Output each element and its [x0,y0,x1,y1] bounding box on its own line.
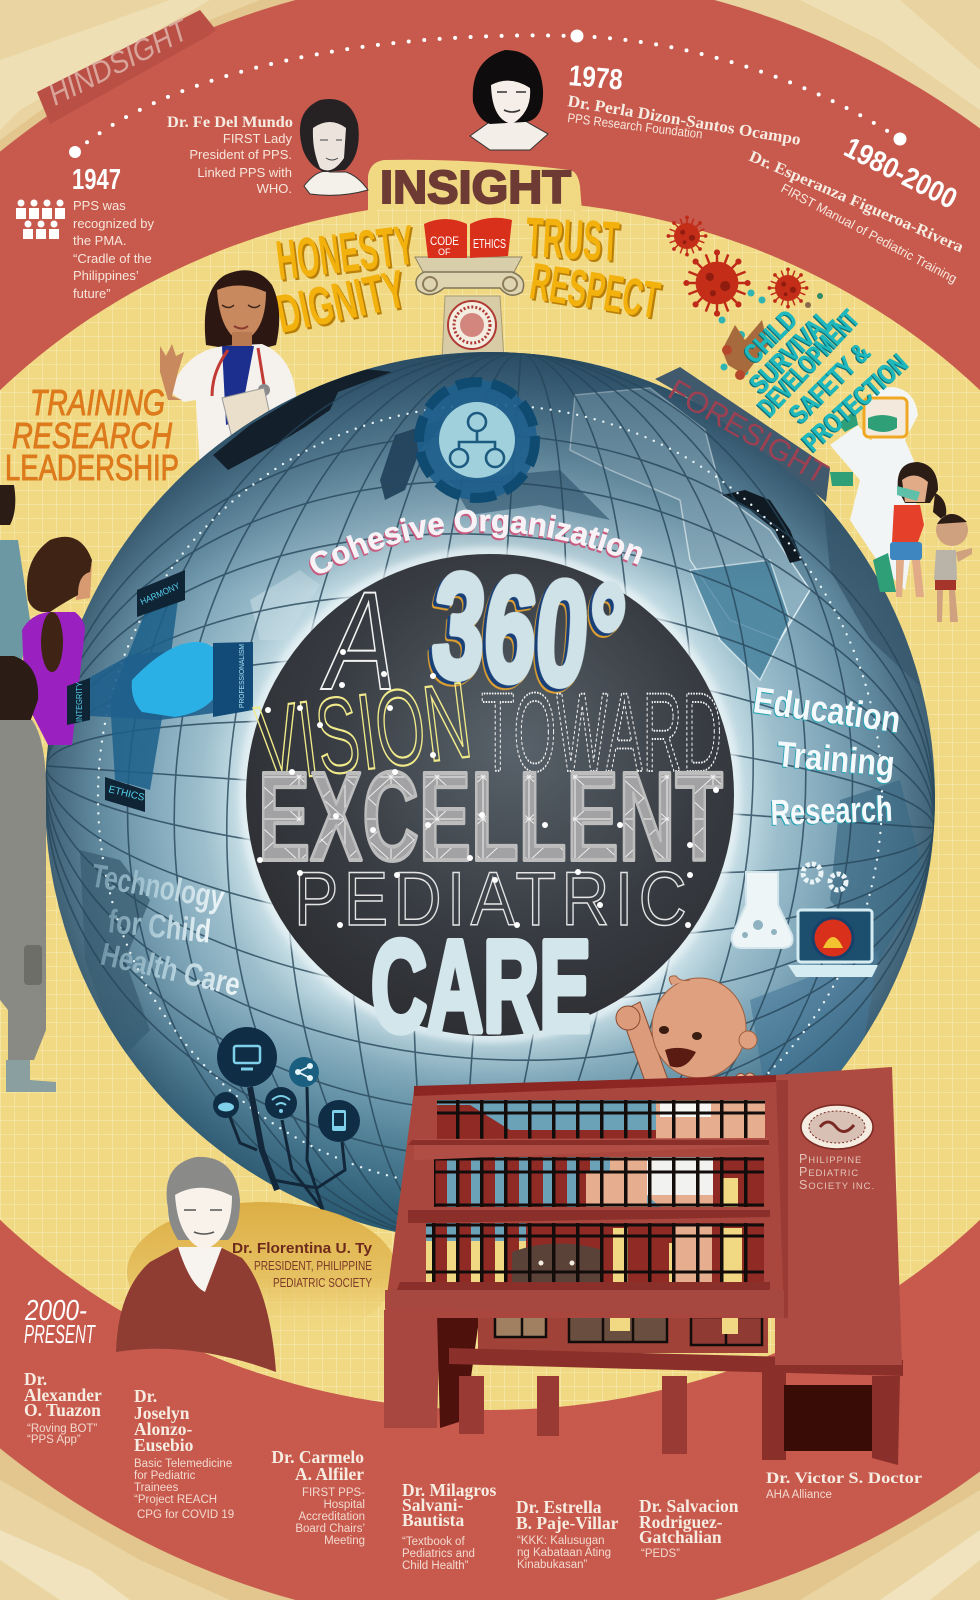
Dr. Alexander O. Tuazon: O. Tuazon [24,1400,101,1420]
crib legs and bench [384,1310,903,1465]
insight heading tab [368,160,582,212]
icon: gears [803,864,846,890]
globe text: education training research [751,679,903,833]
Dr. Florentina U. Ty caption: Dr. Florentina U. Ty [232,1241,372,1257]
heading: training research leadership: TRAINING [30,382,165,423]
globe text: technology for child health care: Health Care [97,936,244,1003]
yellow grid inner field [0,200,980,1410]
Dr. Salvacion Rodriguez-Gatchalian: “PEDS” [641,1548,680,1560]
group of people at left [0,485,92,1092]
timeline 1978 block: Dr. Perla Dizon-Santos Ocampo [566,91,802,149]
technology icons cluster [213,1027,360,1210]
Dr. Fe Del Mundo text: WHO. [257,181,292,196]
Dr. Florentina U. Ty caption: PRESIDENT, PHILIPPINE [254,1259,372,1273]
Dr. Joselyn Alonzo-Eusebio: Basic Telemedicine [134,1458,232,1470]
icon: coronavirus large [683,249,751,317]
Dr. Carmelo A. Alfiler: Board Chairs’ [295,1523,365,1535]
child survival text block: SAFETY & [784,337,876,429]
main title: 360° [428,542,631,720]
Dr. Salvacion Rodriguez-Gatchalian: Rodriguez- [639,1512,723,1532]
center dark circle [239,547,741,1043]
Dr. Fe Del Mundo text [167,114,293,196]
cross with hand icon: HARMONY [139,581,181,607]
Dr. Florentina U. Ty portrait [116,1157,397,1372]
main title: VISION [250,659,477,805]
arc title: cohesive organization: Cohesive Organization [309,510,642,576]
crib front frame [384,1075,784,1318]
crib side panel with seal and name: PHILIPPINE [799,1152,862,1166]
values: honesty dignity trust respect: TRUST [524,205,621,273]
Dr. Milagros Salvani-Bautista: Pediatrics and [402,1548,475,1560]
Dr. Estrella B. Paje-Villar: ng Kabataan Ating [517,1547,611,1559]
globe text: education training research: Training [775,733,896,784]
Dr. Carmelo A. Alfiler: FIRST PPS- [302,1487,365,1499]
timeline dotted arc [69,30,906,158]
crib building [384,1067,903,1465]
Dr. Estrella B. Paje-Villar: “KKK: Kalusugan [517,1535,605,1547]
main title [250,542,723,1059]
values: honesty dignity trust respect: DIGNITY [271,259,411,345]
crib side panel with seal and name [768,1067,902,1365]
timeline 1980-2000 block: Dr. Esperanza Figueroa-Rivera [746,148,966,256]
globe text: education training research: Education [751,679,903,741]
Dr. Salvacion Rodriguez-Gatchalian [639,1496,739,1560]
child survival text block: DEVELOPMENT [752,304,865,422]
values: honesty dignity trust respect: RESPECT [526,253,664,330]
timeline 1947 block: “Cradle of the [73,251,152,266]
heading: 2000-present: 2000- [24,1295,87,1327]
heading: training research leadership [5,382,179,488]
globe text: technology for child health care: for Child [106,902,213,950]
timeline 1947 block [72,164,154,301]
cross with hand icon [67,570,253,812]
main title: CARE [371,913,591,1059]
health worker in protective suit [830,387,918,592]
crib window row 1 [437,1100,765,1140]
icon: coronavirus fading [768,268,808,308]
icon: organization gear network [417,380,537,500]
values: honesty dignity trust respect: HONESTY [273,213,417,292]
heading: training research leadership: RESEARCH [12,415,173,456]
heading: 2000-present [24,1295,96,1349]
timeline 1947 block: future” [73,286,111,301]
globe text: education training research: Research [770,788,893,833]
main title: A [321,562,396,719]
Dr. Salvacion Rodriguez-Gatchalian: Dr. Salvacion [639,1496,739,1516]
child with mask [890,462,946,597]
child survival text block: SURVIVAL [744,304,839,399]
Dr. Estrella B. Paje-Villar: Kinabukasan” [517,1559,587,1571]
Dr. Joselyn Alonzo-Eusebio: Alonzo- [134,1419,192,1439]
crib window row 3 with teddy bear [426,1223,764,1283]
infographic canvas: TOWARD [481,670,722,795]
globe continents [15,322,965,1272]
heading: 2000-present: PRESENT [24,1319,96,1349]
Dr. Alexander O. Tuazon: Dr. [24,1369,47,1389]
Dr. Joselyn Alonzo-Eusebio: “Project REACH [134,1494,217,1506]
globe [46,352,935,1232]
doctor illustration [160,270,296,470]
Dr. Joselyn Alonzo-Eusebio [134,1386,234,1521]
Dr. Milagros Salvani-Bautista [402,1480,496,1572]
pillar with code of ethics book: OF [438,247,451,257]
Dr. Joselyn Alonzo-Eusebio: for Pediatric [134,1470,196,1482]
main title: PEDIATRIC [294,857,692,942]
ribbon: foresight: FORESIGHT [662,373,833,491]
Dr. Alexander O. Tuazon: “PPS App” [27,1434,81,1446]
crib window row 2 [434,1157,764,1207]
portrait: Dr. Perla Dizon-Santos Ocampo [470,50,548,150]
timeline 1978 block: 1978 [567,60,624,97]
icon: group of people [16,200,65,239]
timeline 1947 block: recognized by [73,216,154,231]
Dr. Victor S. Doctor: Dr. Victor S. Doctor [766,1470,922,1487]
icon: coronavirus small [667,216,707,256]
timeline 1978 block: PPS Research Foundation [567,110,703,142]
cross with hand icon: ETHICS [107,784,146,804]
Dr. Joselyn Alonzo-Eusebio: Joselyn [134,1403,190,1423]
crib side panel with seal and name: SOCIETY INC. [799,1178,875,1192]
timeline 1947 block: Philippines’ [73,268,139,283]
Dr. Fe Del Mundo text: FIRST Lady [223,131,292,146]
Dr. Joselyn Alonzo-Eusebio: Dr. [134,1386,157,1406]
Dr. Victor S. Doctor: AHA Alliance [766,1489,832,1501]
Dr. Joselyn Alonzo-Eusebio: Eusebio [134,1435,194,1455]
timeline 1980-2000 block: 1980-2000 [839,132,962,216]
Dr. Milagros Salvani-Bautista: “Textbook of [402,1536,465,1548]
Dr. Joselyn Alonzo-Eusebio: CPG for COVID 19 [137,1509,234,1521]
Dr. Milagros Salvani-Bautista: Dr. Milagros [402,1480,496,1500]
Dr. Milagros Salvani-Bautista: Bautista [402,1510,464,1530]
Dr. Carmelo A. Alfiler: Meeting [324,1535,365,1547]
Dr. Florentina U. Ty caption [232,1241,373,1290]
Dr. Alexander O. Tuazon: Alexander [24,1385,102,1405]
child survival text block: CHILD [738,304,803,369]
icon: flask [732,872,793,948]
Dr. Estrella B. Paje-Villar: B. Paje-Villar [516,1513,619,1533]
Dr. Florentina U. Ty caption: PEDIATRIC SOCIETY [273,1276,373,1290]
Dr. Fe Del Mundo text: Dr. Fe Del Mundo [167,114,293,131]
Dr. Joselyn Alonzo-Eusebio: Trainees [134,1482,179,1494]
heading: insight: INSIGHT [380,161,571,213]
Dr. Milagros Salvani-Bautista: Salvani- [402,1495,463,1515]
ribbon: hindsight: HINDSIGHT [43,13,196,112]
Dr. Carmelo A. Alfiler: Hospital [323,1499,365,1511]
child survival text block [738,304,914,457]
pillar with code of ethics book: CODE [430,234,459,248]
child survival text block: PROTECTION [797,348,914,457]
portrait: Dr. Fe Del Mundo [300,99,368,195]
globe text: technology for child health care: Technology [89,856,228,916]
Dr. Alexander O. Tuazon: “Roving BOT” [27,1423,97,1435]
icon: laptop with asean logo [788,910,878,977]
Dr. Victor S. Doctor [766,1470,922,1501]
small child [934,514,972,622]
crib side panel with seal and name: PEDIATRIC [799,1165,859,1179]
timeline 1947 block: the PMA. [73,233,126,248]
timeline 1978 block [566,60,802,149]
Dr. Carmelo A. Alfiler [271,1447,365,1547]
values: honesty dignity trust respect [271,205,664,345]
Dr. Fe Del Mundo text: Linked PPS with [197,165,292,180]
Dr. Milagros Salvani-Bautista: Child Health” [402,1560,469,1572]
Dr. Estrella B. Paje-Villar [516,1497,619,1571]
Dr. Carmelo A. Alfiler: A. Alfiler [295,1464,364,1484]
timeline 1947 block: 1947 [72,164,121,196]
Dr. Alexander O. Tuazon [24,1369,102,1446]
timeline 1980-2000 block [746,132,966,286]
cross with hand icon: PROFESSIONALISM [237,644,246,708]
cross with hand icon: INTEGRITY [75,681,84,722]
Dr. Carmelo A. Alfiler: Dr. Carmelo [271,1447,364,1467]
virus dissolve particles [718,290,823,380]
timeline 1947 block: PPS was [73,198,126,213]
Dr. Fe Del Mundo text: President of PPS. [189,147,292,162]
Dr. Salvacion Rodriguez-Gatchalian: Gatchalian [639,1527,722,1547]
baby head and arm [616,976,760,1095]
heading: training research leadership: LEADERSHIP [5,447,179,488]
pillar with code of ethics book: ETHICS [473,236,506,251]
pillar with code of ethics book [415,218,524,360]
globe text: technology for child health care [89,856,244,1003]
Dr. Estrella B. Paje-Villar: Dr. Estrella [516,1497,602,1517]
Dr. Carmelo A. Alfiler: Accreditation [299,1511,365,1523]
timeline 1980-2000 block: FIRST Manual of Pediatric Training [779,180,960,286]
